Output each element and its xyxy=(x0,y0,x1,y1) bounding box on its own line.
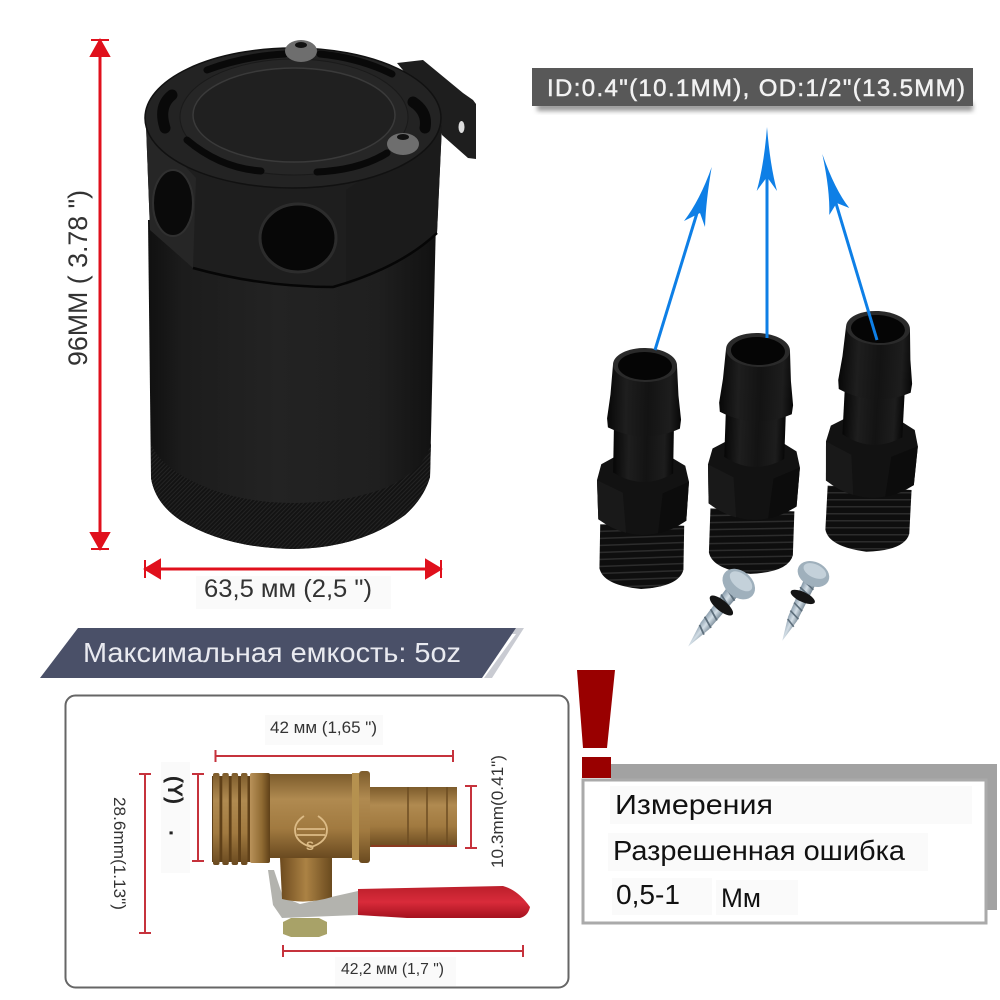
screw left xyxy=(674,562,761,658)
text: measurements: Измерения xyxy=(615,789,773,820)
top cap xyxy=(145,48,441,188)
label: total height: 28.6mm(1.13") xyxy=(110,797,129,910)
text: unit xyxy=(716,880,798,915)
label: bottom length xyxy=(335,957,456,986)
thread xyxy=(212,773,270,865)
valve red handle xyxy=(358,886,530,918)
text: tolerance value: 0,5-1 xyxy=(616,879,680,910)
dimension line: total height xyxy=(139,774,151,933)
hose fittings xyxy=(595,309,925,590)
capacity banner: Максимальная емкость: 5oz xyxy=(83,637,461,668)
valve lever xyxy=(268,870,358,918)
fitting left xyxy=(595,347,691,590)
brand logo: S xyxy=(306,839,314,853)
canister bracket xyxy=(397,60,476,159)
text: tolerance value xyxy=(612,878,712,915)
text: measurements xyxy=(610,786,972,824)
dimension line: bottom xyxy=(283,945,523,957)
dimension: canister height xyxy=(63,40,109,549)
arrow centre xyxy=(757,127,777,338)
text: allowed error: Разрешенная ошибка xyxy=(613,835,905,866)
label: top length xyxy=(265,715,383,745)
barb xyxy=(369,787,457,847)
canister photo xyxy=(145,40,476,549)
brass valve xyxy=(212,771,530,937)
arrow left xyxy=(655,167,712,350)
brand logo xyxy=(295,816,327,853)
cap screws xyxy=(285,40,317,62)
body xyxy=(268,774,352,858)
screw right xyxy=(767,556,834,648)
dimension: canister width xyxy=(145,560,441,609)
canister body xyxy=(148,220,436,549)
fitting centre xyxy=(704,331,805,575)
size label xyxy=(532,68,973,111)
panel: ball valve dimensions xyxy=(66,696,568,988)
label: bottom length: 42,2 мм (1,7 ") xyxy=(341,961,444,978)
dimension: canister width: 63,5 мм (2,5 ") xyxy=(204,575,372,603)
mounting screws xyxy=(674,556,834,658)
dimension line: thread xyxy=(192,774,204,861)
callout box xyxy=(583,780,986,923)
arrow right xyxy=(822,154,877,340)
port holes xyxy=(153,170,193,236)
label: barb diameter: 10.3mm(0.41") xyxy=(488,755,507,868)
label: rotated thread size xyxy=(161,762,190,873)
head block xyxy=(146,125,442,287)
dimension line: top xyxy=(216,750,453,762)
label: rotated thread size: . xyxy=(164,830,188,836)
blue arrows xyxy=(655,127,877,350)
capacity banner xyxy=(40,628,524,678)
fitting right xyxy=(820,309,925,554)
flange xyxy=(359,771,370,863)
label: rotated thread size: (Y) xyxy=(163,776,186,804)
callout: measurement tolerance xyxy=(577,670,997,923)
dimension: canister height: 96MM ( 3.78 ") xyxy=(63,190,93,366)
knurled base xyxy=(151,443,431,549)
valve stem xyxy=(280,858,332,902)
label: top length: 42 мм (1,65 ") xyxy=(270,718,377,737)
size label: ID:0.4"(10.1MM), OD:1/2"(13.5MM) xyxy=(547,75,965,102)
collar xyxy=(352,773,359,860)
callout shadow xyxy=(611,764,997,910)
cap slots xyxy=(187,54,392,172)
text: unit: Мм xyxy=(721,883,761,913)
exclamation mark xyxy=(577,670,615,778)
valve nut xyxy=(283,918,327,937)
dimension line: barb xyxy=(465,786,477,848)
